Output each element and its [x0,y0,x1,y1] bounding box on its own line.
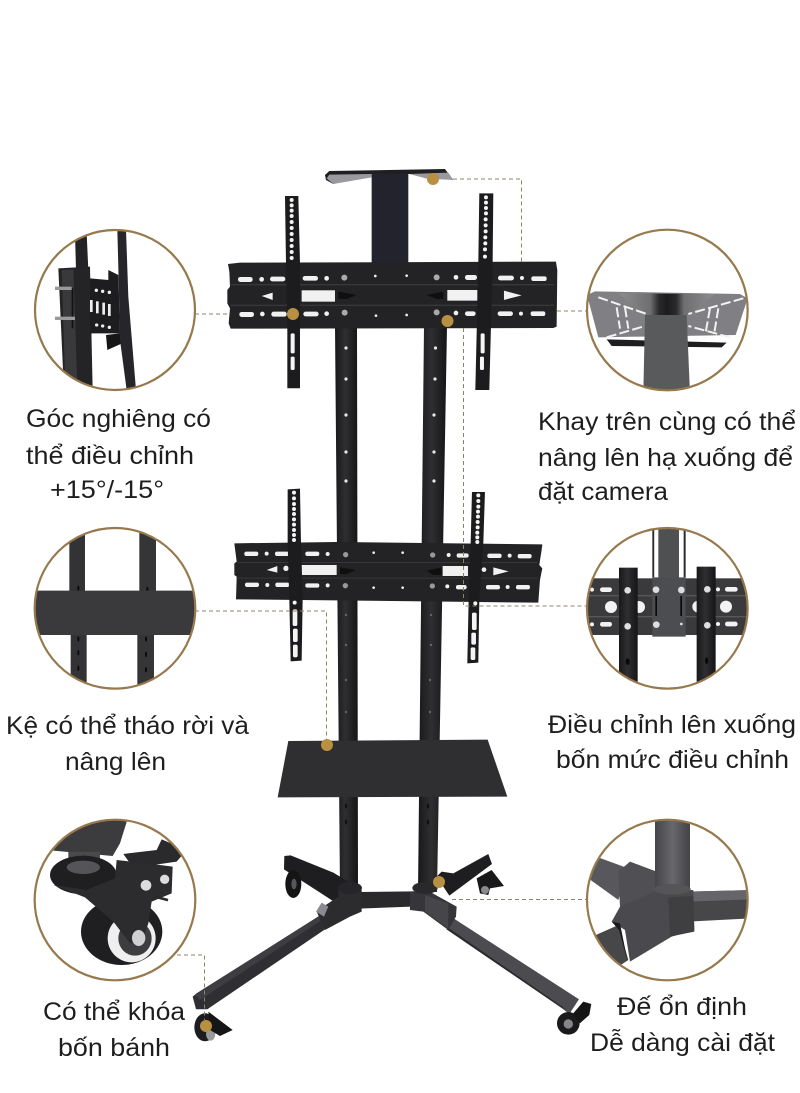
detail circle: base joint [587,817,752,980]
upper mounting bar [227,262,557,329]
caption: locking wheels: Có thể khóa [43,998,185,1026]
caption: tilt angle [26,405,211,504]
lower right bracket [467,492,485,663]
detail circle: tilt bracket [35,229,195,390]
detail circle: locking caster [35,817,195,980]
lower mounting bar [234,542,542,603]
front right caster [557,1002,591,1035]
support columns [335,326,447,892]
shelf [278,740,507,797]
caption: locking wheels [43,998,185,1062]
front left caster [194,1012,233,1041]
caption: top tray: đặt camera [538,478,668,506]
caption: top tray: Khay trên cùng có thể [538,408,796,436]
top tray and upper mount [227,169,557,390]
lower left bracket [288,489,303,661]
leader lines [177,179,587,1020]
infographic canvas [8,169,795,1056]
rear left leg and caster [284,855,357,903]
caption: removable shelf: Kệ có thể tháo rời và [6,712,249,740]
shelf and rolling base [193,740,591,1041]
right hub joint [410,882,457,930]
caption: locking wheels: bốn bánh [58,1034,170,1062]
marker dots [200,173,454,1032]
detail circle: top tray [587,230,748,393]
rear crossbar [358,891,413,909]
left hub joint [316,882,362,930]
caption: top tray: nâng lên hạ xuống để [538,444,793,472]
upper right bracket [475,193,493,390]
caption: stable base: Đế ổn định [617,993,747,1021]
caption: removable shelf: nâng lên [65,748,166,776]
caption: tilt angle: +15°/-15° [50,476,164,504]
caption: height adjustment: Điều chỉnh lên xuống [548,711,796,739]
caption: stable base: Dễ dàng cài đặt [590,1028,775,1057]
tray [325,169,453,184]
caption: height adjustment [548,711,796,774]
lower mount [234,489,542,663]
stand illustration [193,169,591,1041]
caption: tilt angle: thể điều chỉnh [26,442,194,470]
detail circle: height adjustment [585,527,748,689]
detail circle: removable shelf [30,528,200,690]
caption: height adjustment: bốn mức điều chỉnh [556,746,789,774]
rear right leg and caster [437,854,504,896]
caption: tilt angle: Góc nghiêng có [26,405,211,433]
front left leg [193,915,325,1009]
tray support post [372,173,408,263]
upper left bracket [285,196,300,388]
caption: top tray [538,408,796,506]
front right leg [447,915,579,1014]
caption: removable shelf [6,712,249,776]
caption: stable base [590,993,775,1057]
